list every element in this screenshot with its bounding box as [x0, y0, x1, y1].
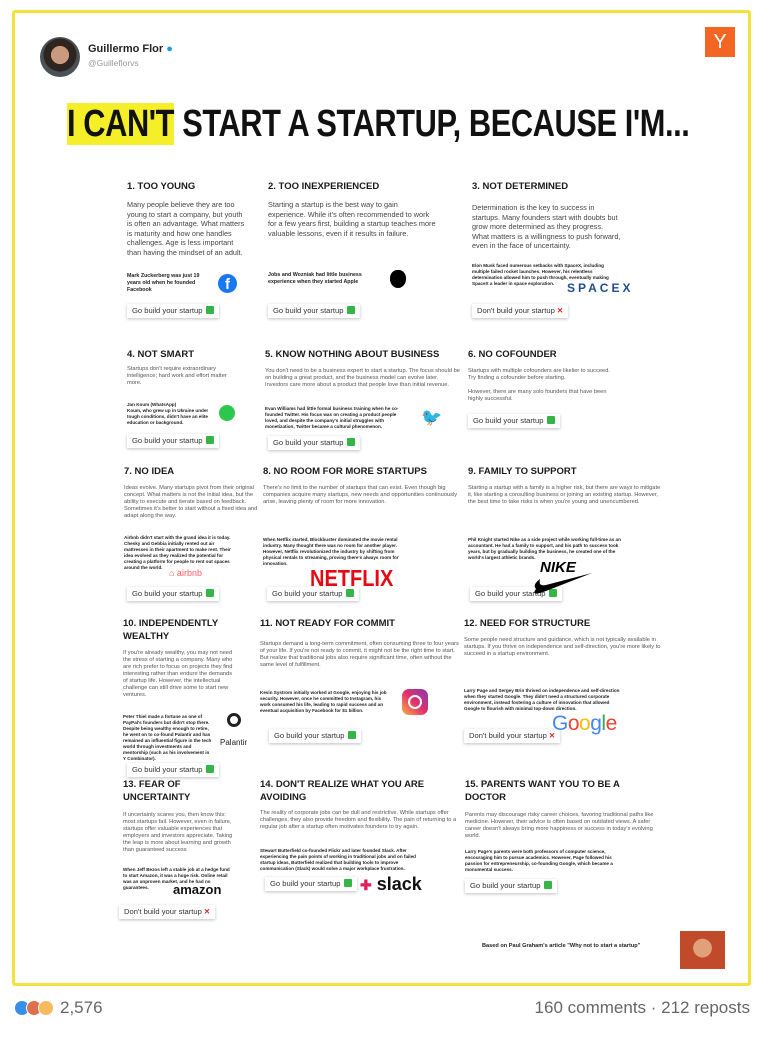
panel: 9 family to support: NIKE: [540, 559, 576, 576]
panel: 1 too young: Mark Zuckerberg was just 19 years old when he founded Facebook: [127, 273, 199, 293]
panel: 11 not ready for commit: Startups demand a long-term commitment, often consuming three to four years of your life. If you're not ready to commit, it might not be the right time to start. But realize that traditional jobs also require significant time, often without the same level of fulfillment.: [260, 641, 459, 668]
reactions: [15, 998, 103, 1017]
photo: Paul Graham: [680, 931, 725, 969]
panel: 3 not determined: Don't build your startup ✕: [477, 306, 563, 315]
panel: 1 too young: [126, 181, 244, 320]
panel: 14 don't realize what you are avoiding: The reality of corporate jobs can be dull and restrictive. While startups offer challenges, they also provide freedom and flexibility. The pain of returning to a regular job after a startup often motivates founders to try again.: [260, 810, 456, 830]
author name: Guillermo Flor ●: [88, 43, 173, 55]
panel: 11 not ready for commit: Kevin Systrom initially worked at Google, enjoying his job security. However, once he committed to Instagram, his work consumed his life, leading to rapid success and an eventual acquisition by Facebook for $1 billion.: [260, 690, 387, 713]
panel: 2 too inexperienced: 2. TOO INEXPERIENCED: [268, 181, 379, 192]
panel: 13 fear of uncertainty: Don't build your startup ✕: [124, 907, 210, 916]
panel: 14 don't realize what you are avoiding: AVOIDING: [260, 792, 306, 803]
panel: 8 no room for more startups: There's no limit to the number of startups that can exist. Even though big companies acquire many startups, new needs and opportunities continuously arise, leaving plenty of room for more innovation.: [263, 485, 457, 505]
panel: 7 no idea: Ideas evolve. Many startups pivot from their original concept. What matters is not the initial idea, but the ability to execute and iterate based on feedback. Sometimes it's better to start without a fixed idea and adapt along the way.: [124, 485, 257, 519]
panel: 14 don't realize what you are avoiding: 14. DON'T REALIZE WHAT YOU ARE: [260, 779, 424, 790]
panel: 13 fear of uncertainty: 13. FEAR OF: [123, 779, 181, 790]
panel: 12 need for structure: Don't build your startup ✕: [469, 731, 555, 740]
panel: 9 family to support: Phil Knight started Nike as a side project while working full-time as an accountant. He had a family to support, and his path to success took years, but by gradually building the business, he created one of the world's largest athletic brands.: [468, 537, 621, 560]
panel: 4 not smart: Jan Koum (WhatsApp): [127, 402, 176, 407]
reactions: 2,576: [60, 998, 103, 1017]
panel: 2 too inexperienced: Starting a startup is the best way to gain experience. While it's often recommended to work for a few years first, building a startup teaches more valuable lessons, even if it results in failure.: [268, 200, 436, 238]
panel: 13 fear of uncertainty: If uncertainty scares you, then know this: most startups fail. However, even in failure, startups offer valuable experiences that employers and investors appreciate. Taking the leap is more about learning and growth than guaranteed success: [123, 812, 232, 853]
panel: 5 know nothing about business: Evan Williams had little formal business training when he co-founded Twitter. His focus was on creating a product people loved, and despite the company's initial struggles with monetization, Twitter became a cultural phenomenon.: [265, 406, 398, 429]
panel: 9 family to support: Go build your startup: [475, 589, 546, 598]
panel: 15 parents want you to be a doctor: 15. PARENTS WANT YOU TO BE A: [465, 779, 620, 790]
panel: 13 fear of uncertainty: UNCERTAINTY: [123, 792, 190, 803]
panel: 5 know nothing about business: 🐦: [421, 408, 442, 427]
panel: 10 independently wealthy: WEALTHY: [123, 631, 169, 642]
panel: 6 no cofounder: Go build your startup: [473, 416, 544, 425]
panel: 10 independently wealthy: If you're already wealthy, you may not need the stress of starting a company. Many who are rich prefer to focus on projects they find interesting rather than endure the demands of startup life. However, the intellectual challenge can still drive some to start new ventures.: [123, 650, 232, 698]
panel: 13 fear of uncertainty: amazon: [173, 882, 221, 897]
panel: 8 no room for more startups: [263, 466, 457, 604]
panel: 3 not determined: 3. NOT DETERMINED: [472, 181, 568, 192]
panel: 8 no room for more startups: 8. NO ROOM FOR MORE STARTUPS: [263, 466, 427, 477]
panel: 15 parents want you to be a doctor: Parents may discourage risky career choices, favoring traditional paths like medicine. However, their advice is often based on outdated views. A safer career doesn't always bring more happiness or success in today's evolving world.: [465, 812, 653, 839]
panel: 4 not smart: [126, 349, 235, 450]
icon: Y Combinator logo: Y: [713, 31, 727, 53]
panel: 5 know nothing about business: 5. KNOW NOTHING ABOUT BUSINESS: [265, 349, 439, 360]
panel: 7 no idea: 7. NO IDEA: [124, 466, 174, 477]
panel: 4 not smart: Koum, who grew up in Ukraine under tough conditions, didn't have an elite education or background.: [127, 408, 208, 425]
panel: 14 don't realize what you are avoiding: [260, 779, 456, 894]
panel: 3 not determined: Elon Musk faced numerous setbacks with SpaceX, including multiple failed rocket launches. However, his relentless determination allowed him to push through, eventually making SpaceX a leader in space exploration.: [472, 263, 609, 286]
panel: 10 independently wealthy: Palantir: [220, 738, 247, 747]
panel: 3 not determined: SPACEX: [567, 281, 633, 295]
panel: 3 not determined: Determination is the key to success in startups. Many founders start with doubts but grow more determined as they progress. What matters is a willingness to push forward, even in the face of uncertainty.: [472, 203, 620, 250]
panel: 1 too young: Many people believe they are too young to start a company, but youth is often an advantage. What matters is maturity and how one handles challenges. Age is less important than having the mindset of an adult.: [127, 200, 244, 257]
panel: 7 no idea: Go build your startup: [132, 589, 202, 598]
panel: 8 no room for more startups: NETFLIX: [310, 566, 393, 592]
panel: 14 don't realize what you are avoiding: ✚ slack: [360, 874, 422, 894]
panel: 7 no idea: ⌂ airbnb: [169, 568, 202, 578]
panel: 2 too inexperienced: [266, 181, 436, 320]
panel: 15 parents want you to be a doctor: [464, 779, 654, 896]
panel: 5 know nothing about business: [265, 349, 460, 452]
panel: 15 parents want you to be a doctor: Go build your startup: [470, 881, 540, 890]
panel: 13 fear of uncertainty: [118, 779, 232, 922]
panel: 14 don't realize what you are avoiding: Go build your startup: [270, 879, 340, 888]
panel: 10 independently wealthy: Peter Thiel made a fortune as one of PayPal's founders but didn't stop there. Despite being wealthy enough to retire, he went on to co-found Palantir and has remained an influential figure in the tech world through investments and mentorship (such as his involvement in Y Combinator).: [123, 714, 211, 761]
panel: 6 no cofounder: [466, 349, 610, 430]
panel: 4 not smart: Go build your startup: [132, 436, 202, 445]
panel: 8 no room for more startups: When Netflix started, Blockbuster dominated the movie rental industry. Many thought there was no room for another player. However, Netflix revolutionized the industry by shifting from physical rentals to streaming, proving there's always room for innovation.: [263, 537, 399, 566]
footer note: Based on Paul Graham's article "Why not to start a startup": [482, 943, 640, 949]
panel: 2 too inexperienced: Go build your startup: [273, 306, 344, 315]
panel: 9 family to support: [468, 466, 660, 604]
comments and reposts: 160 comments · 212 reposts: [535, 998, 750, 1017]
panel: 6 no cofounder: However, there are many solo founders that have been highly successful.: [468, 389, 606, 402]
panel: 12 need for structure: Larry Page and Sergey Brin thrived on independence and self-direction when they started Google. They didn't need a structured corporate environment, instead fostering a culture of innovation that allowed Google to flourish with minimal top-down direction.: [464, 688, 619, 711]
title: I CAN'T START A STARTUP, BECAUSE I'M...: [67, 103, 689, 145]
panel: 9 family to support: 9. FAMILY TO SUPPORT: [468, 466, 577, 477]
panel: 1 too young: Go build your startup: [132, 306, 202, 315]
panel: 12 need for structure: Google: [552, 712, 617, 735]
panel: 2 too inexperienced: Jobs and Wozniak had little business experience when they started Apple: [268, 272, 362, 285]
panel: 11 not ready for commit: [260, 618, 459, 746]
panel: 5 know nothing about business: You don't need to be a business expert to start a startup. The focus should be on building a great product, and the business model can evolve later. Investors care more about a product that people love than initial revenue.: [265, 368, 460, 388]
panel: 12 need for structure: 12. NEED FOR STRUCTURE: [464, 618, 590, 629]
panel: 10 independently wealthy: [123, 618, 248, 780]
panel: 13 fear of uncertainty: When Jeff Bezos left a stable job at a hedge fund to start Amazon, it was a huge risk. Online retail was an unproven market, and he had no guarantees.: [123, 867, 230, 890]
panel: 12 need for structure: Some people need structure and guidance, which is not typically available in startups. If you thrive on independence and self-direction, you're more likely to succeed in a startup environment.: [464, 637, 660, 657]
author handle: @Guilleflorvs: [88, 58, 139, 68]
panel: 6 no cofounder: Startups with multiple cofounders are likelier to succeed. Try finding a cofounder before starting.: [468, 368, 610, 381]
panel: 12 need for structure: [462, 618, 660, 746]
panel: 6 no cofounder: 6. NO COFOUNDER: [468, 349, 557, 360]
panel: 15 parents want you to be a doctor: DOCTOR: [465, 792, 506, 803]
panel: 4 not smart: 4. NOT SMART: [127, 349, 194, 360]
icon: Y Combinator logo: [705, 27, 735, 57]
panel: 14 don't realize what you are avoiding: Stewart Butterfield co-founded Flickr and later founded Slack. After experiencing the pain points of working in traditional jobs and on failed startup ideas, Butterfield realized that building tools to improve communication (Slack) would solve a major workplace frustration.: [260, 848, 416, 871]
panel: 1 too young: 1. TOO YOUNG: [127, 181, 195, 192]
panel: 11 not ready for commit: Go build your startup: [274, 731, 344, 740]
panel: 10 independently wealthy: Go build your startup: [132, 765, 202, 774]
panel: 7 no idea: Airbnb didn't start with the grand idea it is today. Chesky and Gebbia initially rented out air mattresses in their apartment to make rent. Their idea evolved as they realized the potential for creating a platform for people to rent out spaces around the world.: [124, 535, 231, 570]
panel: 11 not ready for commit: 11. NOT READY FOR COMMIT: [260, 618, 395, 629]
panel: 9 family to support: Starting a startup with a family is a higher risk, but there are ways to mitigate it, like starting a consulting business or joining an existing startup. However, the best time to take risks is when you're young and unencumbered.: [468, 485, 660, 505]
panel: 8 no room for more startups: Go build your startup: [272, 589, 342, 598]
panel: 10 independently wealthy: 10. INDEPENDENTLY: [123, 618, 218, 629]
panel: 5 know nothing about business: Go build your startup: [273, 438, 344, 447]
avatar: [40, 37, 80, 77]
panel: 4 not smart: Startups don't require extraordinary intelligence; hard work and effort matter more.: [127, 366, 227, 386]
panel: 1 too young: f: [225, 276, 230, 293]
panel: 3 not determined: [470, 181, 633, 320]
panel: 7 no idea: [124, 466, 257, 604]
panel: 15 parents want you to be a doctor: Larry Page's parents were both professors of computer science, encouraging him to pursue academics. However, Page followed his passion for entrepreneurship, co-founding Google, which became a monumental success.: [465, 849, 613, 872]
